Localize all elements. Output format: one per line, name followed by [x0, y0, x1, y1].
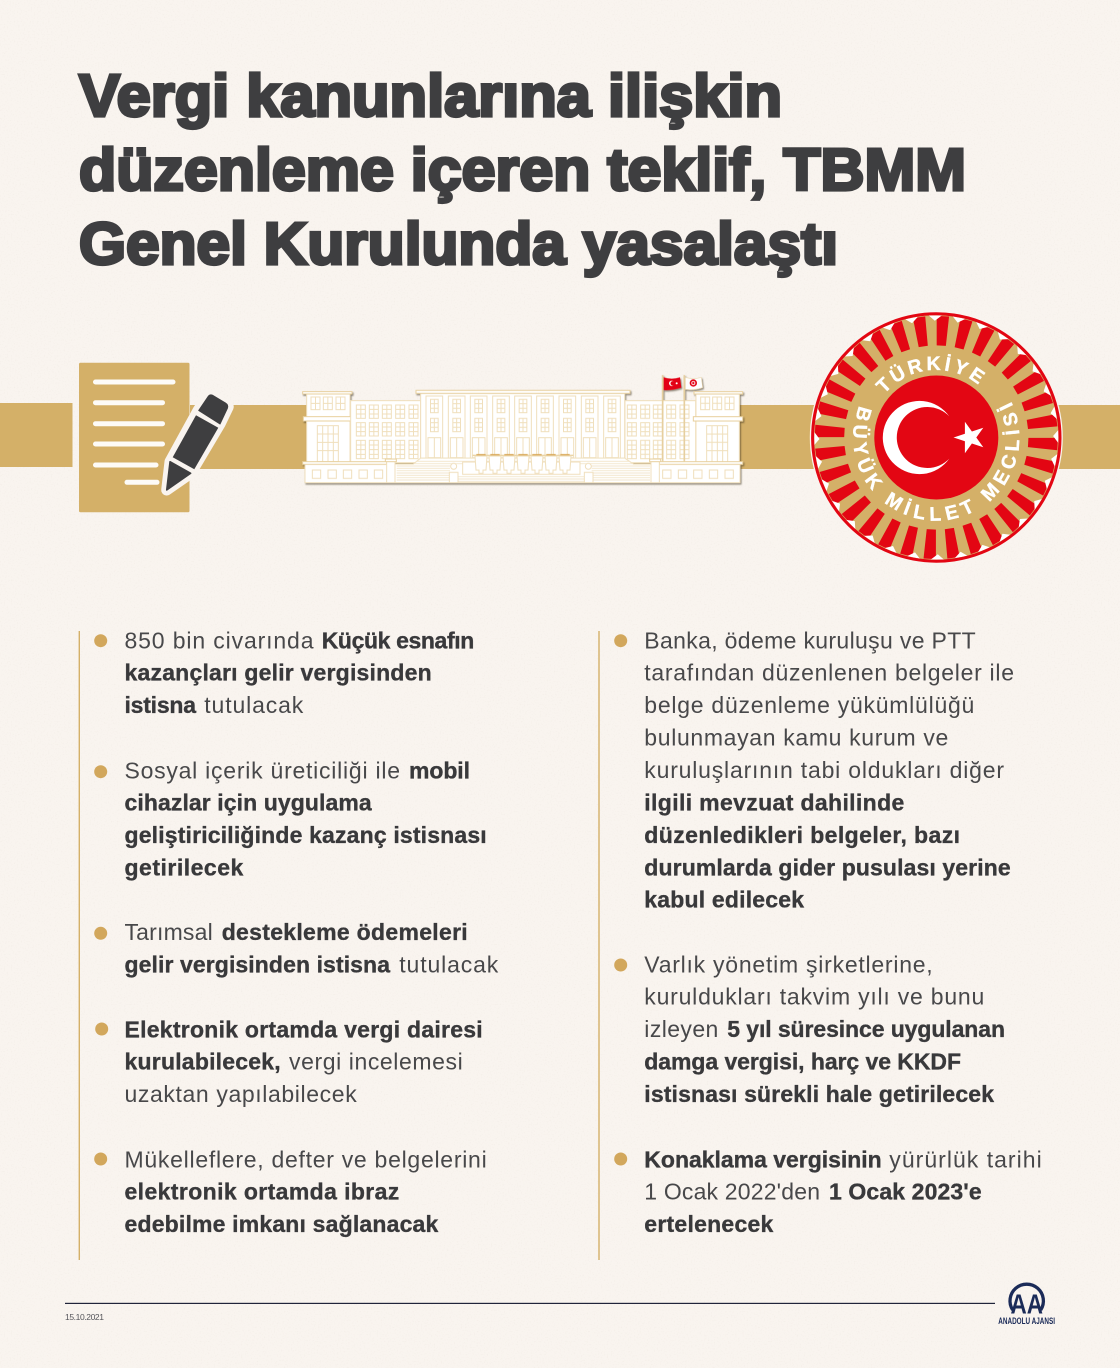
item: mükellefler: Mükelleflere, defter ve belgelerini [124, 1146, 487, 1172]
emblem: TBMM seal [810, 312, 1063, 563]
item: elektronik vergi dairesi: vergi incelemesi [289, 1049, 463, 1075]
item: sosyal içerik: mobil [409, 757, 470, 783]
seal rays [814, 315, 1058, 560]
lamps [449, 463, 593, 483]
footer rule [65, 1303, 995, 1304]
item: sosyal içerik: cihazlar için uygulama [124, 790, 372, 816]
right tower [693, 392, 743, 463]
item: varlık yönetim şirketleri: Varlık yönetim şirketlerine, [644, 951, 933, 977]
left base with squares [303, 459, 396, 483]
title [79, 62, 966, 277]
item: sosyal içerik: Sosyal içerik üreticiliği ile [124, 757, 400, 783]
item: sosyal içerik [94, 757, 487, 880]
item: mükellefler [94, 1146, 487, 1237]
item: banka ve PTT belgeleri: ilgili mevzuat dahilinde [644, 790, 904, 816]
flagpoles and flags [663, 375, 703, 461]
document text lines [96, 382, 173, 482]
title: Vergi kanunlarına ilişkin [79, 62, 782, 129]
item: tarımsal destekleme: Tarımsal [124, 919, 213, 945]
item: varlık yönetim şirketleri [614, 951, 1005, 1107]
gold band: right segment [190, 405, 1120, 469]
item: tarımsal destekleme: tutulacak [399, 952, 499, 978]
left column rule [79, 631, 80, 1260]
document sheet [79, 363, 190, 512]
item: mükellefler: edebilme imkanı sağlanacak [124, 1211, 439, 1237]
item: banka ve PTT belgeleri: kuruluşlarının tabi oldukları diğer [644, 757, 1004, 783]
star [954, 422, 983, 453]
crescent [883, 401, 949, 474]
item: küçük esnaf: tutulacak [204, 692, 304, 718]
item: banka ve PTT belgeleri: bulunmayan kamu kurum ve [644, 724, 948, 750]
seal outer ring [813, 314, 1060, 561]
icon: document and pencil [79, 363, 228, 512]
seal gold disc [814, 315, 1059, 560]
item: elektronik vergi dairesi: Elektronik ortamda vergi dairesi [124, 1016, 483, 1042]
item: banka ve PTT belgeleri: durumlarda gider pusulası yerine [644, 854, 1011, 880]
central block [416, 390, 630, 460]
item: küçük esnaf [94, 627, 474, 718]
item: konaklama vergisi: yürürlük tarihi [889, 1146, 1042, 1172]
item: mükellefler: elektronik ortamda ibraz [124, 1179, 399, 1205]
item: elektronik vergi dairesi [95, 1016, 483, 1107]
left wing [351, 401, 421, 463]
item: tarımsal destekleme [94, 919, 499, 978]
item: konaklama vergisi: 1 Ocak 2022'den [644, 1179, 820, 1205]
item: konaklama vergisi: Konaklama vergisinin [644, 1146, 882, 1172]
gold band: left segment [0, 403, 72, 467]
item: banka ve PTT belgeleri: tarafından düzenlenen belgeler ile [644, 660, 1014, 686]
item: konaklama vergisi: 1 Ocak 2023'e [829, 1179, 982, 1205]
item: sosyal içerik: geliştiriciliğinde kazanç istisnası [124, 822, 487, 848]
seal text top: TÜRKİYE [874, 354, 986, 392]
item: küçük esnaf: istisna [124, 692, 196, 718]
illustration: parliament building [303, 375, 743, 483]
pencil [167, 395, 228, 490]
item: banka ve PTT belgeleri: belge düzenleme yükümlülüğü [644, 692, 974, 718]
item: küçük esnaf: Küçük esnafın [322, 627, 474, 653]
item: elektronik vergi dairesi: kurulabilecek, [124, 1049, 281, 1075]
item: küçük esnaf: 850 bin civarında [124, 627, 314, 653]
right base with squares [650, 459, 743, 483]
seal halo [810, 311, 1063, 564]
item: varlık yönetim şirketleri: izleyen [644, 1016, 718, 1042]
seal text bottom: BÜYÜK MİLLET MECLİSİ [853, 402, 1020, 521]
item: sosyal içerik: getirilecek [124, 854, 244, 880]
item: küçük esnaf: kazançları gelir vergisinden [124, 660, 432, 686]
item: banka ve PTT belgeleri [614, 627, 1014, 913]
item: tarımsal destekleme: destekleme ödemeleri [222, 919, 468, 945]
item: banka ve PTT belgeleri: Banka, ödeme kuruluşu ve PTT [644, 627, 976, 653]
item: varlık yönetim şirketleri: damga vergisi, harç ve KKDF [644, 1048, 961, 1074]
item: konaklama vergisi [614, 1146, 1042, 1237]
left tower [303, 392, 352, 463]
item: banka ve PTT belgeleri: düzenledikleri belgeler, bazı [644, 822, 960, 848]
front steps [395, 458, 652, 483]
item: konaklama vergisi: ertelenecek [644, 1211, 774, 1237]
right column rule [598, 631, 600, 1260]
right wing [625, 401, 696, 463]
item: banka ve PTT belgeleri: kabul edilecek [644, 887, 804, 913]
central portico [463, 454, 580, 474]
title: Genel Kurulunda yasalaştı [79, 210, 838, 277]
logo: Anadolu Ajansı: ANADOLU AJANSI [998, 1316, 1055, 1326]
item: tarımsal destekleme: gelir vergisinden istisna [124, 952, 390, 978]
title: düzenleme içeren teklif, TBMM [79, 136, 966, 203]
item: varlık yönetim şirketleri: istisnası sürekli hale getirilecek [644, 1081, 994, 1107]
item: varlık yönetim şirketleri: 5 yıl süresince uygulanan [727, 1016, 1005, 1042]
logo: Anadolu Ajansı: AA [1010, 1288, 1043, 1319]
logo: Anadolu Ajansı [998, 1284, 1055, 1326]
seal centre disc [874, 376, 998, 500]
item: varlık yönetim şirketleri: kuruldukları takvim yılı ve bunu [644, 984, 984, 1010]
item: elektronik vergi dairesi: uzaktan yapılabilecek [124, 1081, 357, 1107]
footer date: 15.10.2021 [65, 1312, 104, 1322]
